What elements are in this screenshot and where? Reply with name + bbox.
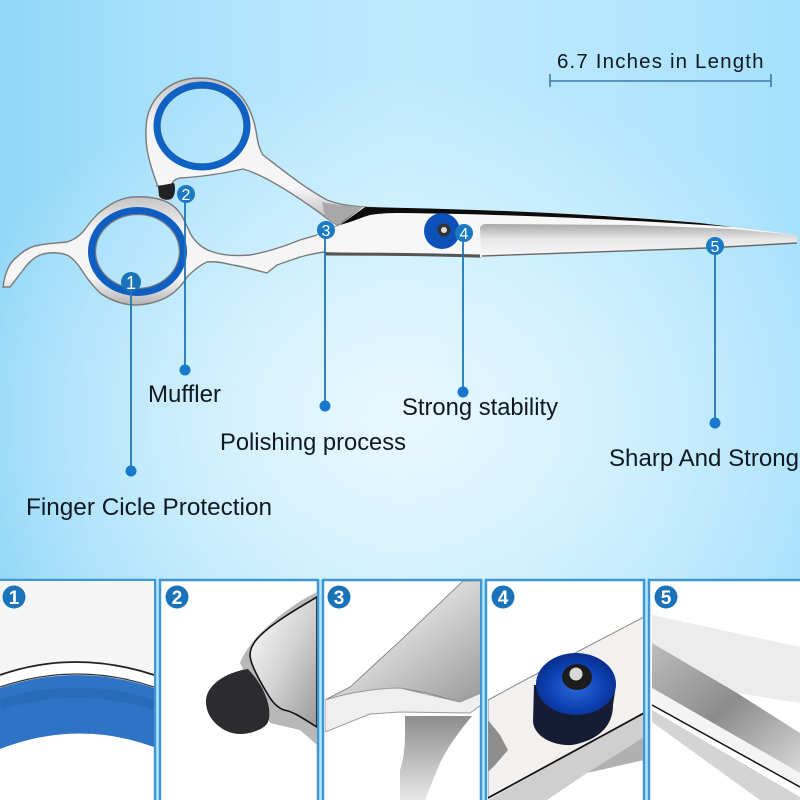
- pivot wedge: [322, 202, 363, 225]
- muffler bumper: [158, 183, 175, 200]
- panel 3: polishing detail: [323, 580, 481, 800]
- panel 1: finger ring detail: [0, 580, 155, 800]
- panel 1: finger ring detail: 1: [9, 588, 20, 609]
- dimension label: 6.7 inches in length: [550, 50, 771, 87]
- label: sharp and strong: Sharp And Strong: [609, 445, 799, 472]
- label: strong stability: Strong stability: [402, 394, 558, 421]
- blade: [317, 207, 797, 257]
- blade dark spine: [340, 207, 733, 227]
- panel 4: pivot screw detail: [486, 580, 644, 800]
- callout line 2: 2: [182, 187, 191, 204]
- callout line 3: 3: [322, 223, 331, 240]
- panel 2: muffler detail: 2: [172, 588, 182, 609]
- panel 2: muffler detail: [160, 580, 318, 800]
- upper blue ring: [157, 85, 247, 167]
- pivot screw: [424, 213, 460, 249]
- callout line 5: [706, 237, 724, 428]
- panel 5: blade edge detail: 5: [661, 588, 672, 609]
- blade bottom edge: [325, 254, 480, 256]
- callout line 4: 4: [460, 226, 469, 243]
- callout line 3: [317, 221, 335, 412]
- panel 3: polishing detail: 3: [334, 588, 344, 609]
- upper finger handle: [146, 78, 363, 225]
- panel 5: blade edge detail: [649, 580, 800, 800]
- label: polishing process: Polishing process: [220, 429, 406, 456]
- blade cutting line: [482, 243, 797, 256]
- label: muffler: Muffler: [148, 381, 221, 408]
- blade bevel: [480, 224, 797, 257]
- label: finger circle protection: Finger Cicle Protection: [26, 494, 272, 521]
- callout line 5: 5: [711, 239, 720, 256]
- scissors illustration: [3, 78, 797, 305]
- panel 4: pivot screw detail: 4: [498, 588, 509, 609]
- callout line 2: [177, 185, 195, 376]
- lower handle with tail: [3, 197, 480, 305]
- callout line 4: [455, 224, 473, 398]
- lower blue ring: [92, 210, 184, 292]
- callout line 1: 1: [126, 273, 136, 293]
- callout line 1: [121, 272, 141, 476]
- dimension label: 6.7 inches in length: 6.7 Inches in Length: [557, 50, 765, 73]
